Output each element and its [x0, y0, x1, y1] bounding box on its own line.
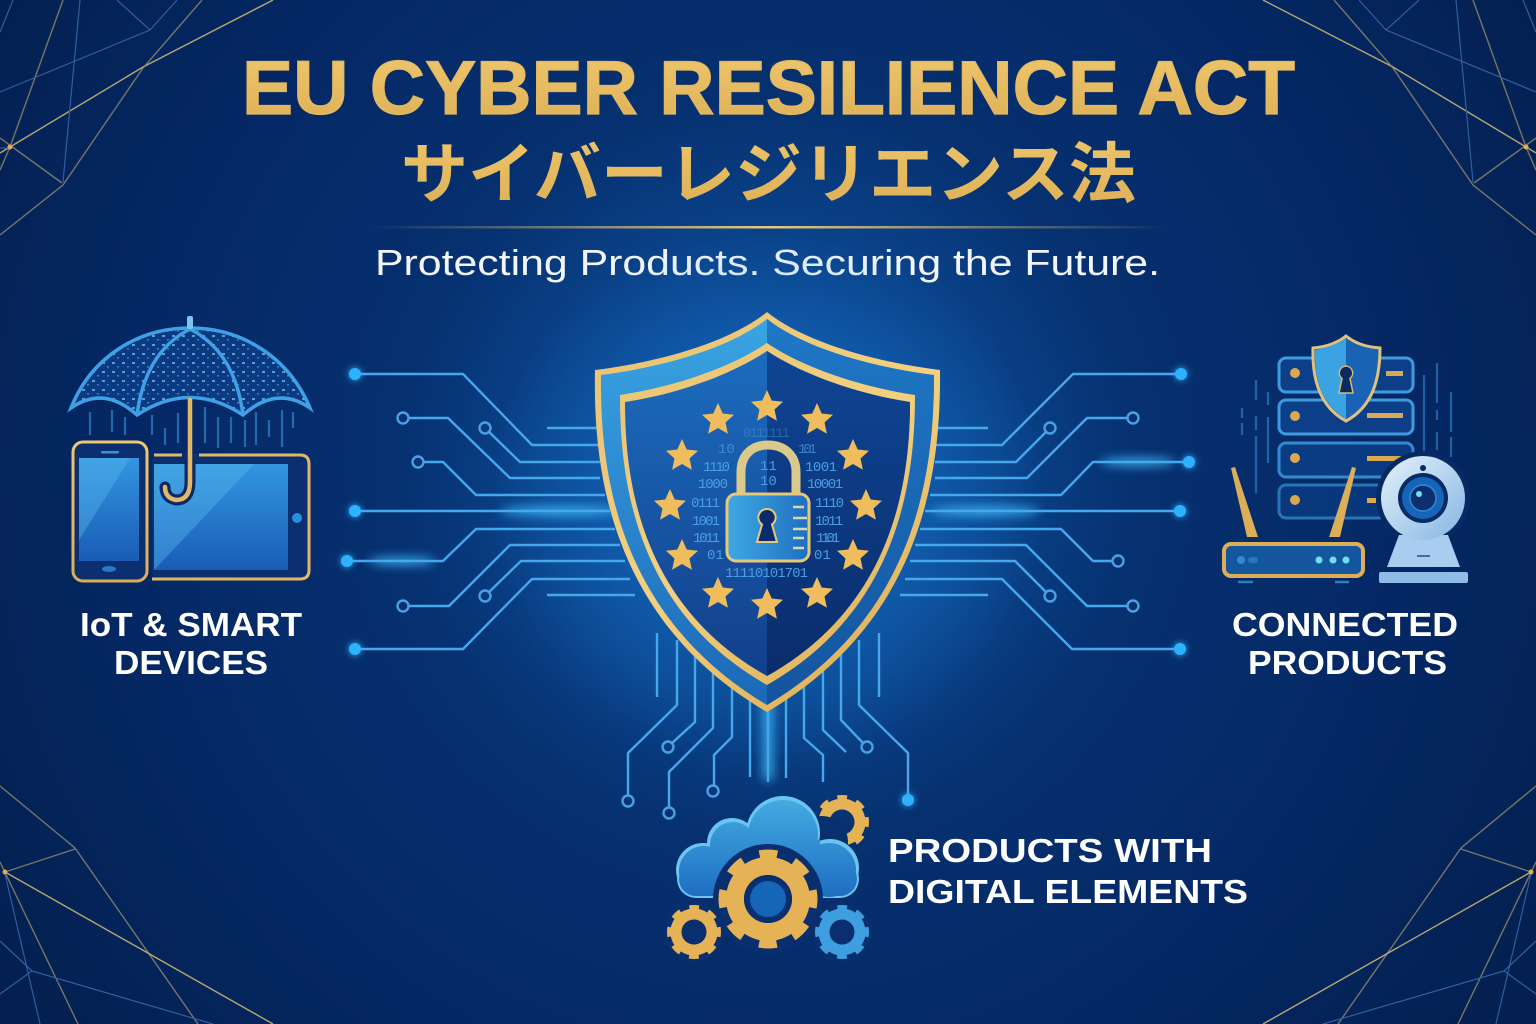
padlock — [727, 445, 809, 561]
subtitle: Protecting Products. Securing the Future. — [375, 242, 1160, 283]
small shield — [1313, 336, 1380, 421]
binary digits: 1011 — [693, 531, 720, 547]
label: connected products — [1232, 606, 1458, 681]
data streaks — [1242, 363, 1451, 493]
icon: server router camera — [1224, 336, 1470, 583]
binary digits: 1110 — [703, 460, 730, 476]
title: EU CYBER RESILIENCE ACT — [242, 46, 1295, 131]
label: products with digital elements — [888, 832, 1248, 910]
binary digits: 01 — [814, 548, 831, 564]
binary digits: 10001 — [807, 477, 843, 493]
camera — [1376, 451, 1470, 583]
gear halo — [664, 844, 872, 962]
shield inner field — [625, 351, 910, 676]
EU stars — [654, 390, 882, 619]
phone — [73, 442, 147, 581]
binary digits: 1000 — [698, 477, 728, 493]
circuit traces left — [341, 368, 635, 655]
shield outer frame — [595, 312, 940, 712]
rain — [90, 407, 293, 448]
umbrella handle — [165, 400, 190, 500]
binary digits: 01 — [707, 548, 724, 564]
padlock keyhole — [757, 509, 777, 542]
shield rim — [601, 319, 934, 705]
padlock dial — [793, 507, 807, 548]
binary digits: 1110 — [815, 496, 844, 512]
label: iot and smart devices — [80, 606, 302, 681]
padlock shackle — [741, 445, 796, 495]
binary digits: 0111111 — [743, 426, 790, 442]
divider — [370, 226, 1170, 228]
corner lines top left — [0, 0, 273, 235]
icon: umbrella over devices — [70, 316, 312, 581]
padlock body — [727, 494, 809, 561]
binary digits: 101 — [798, 442, 817, 458]
central shield — [595, 312, 940, 712]
umbrella canopy — [70, 316, 312, 417]
corner lines bottom left — [0, 786, 273, 1024]
right gear — [814, 904, 870, 960]
glow behind shield — [487, 230, 1047, 770]
corner lines bottom right — [1263, 786, 1536, 1024]
label: connected products: PRODUCTS — [1248, 644, 1447, 681]
circuit traces right — [900, 368, 1195, 655]
binary digits — [691, 426, 844, 582]
binary digits: 11 — [760, 459, 777, 475]
japanese title: サイバーレジリエンス法 — [401, 121, 1136, 217]
binary digits: 0111 — [691, 496, 720, 512]
binary digits: 1001 — [805, 460, 837, 476]
label: products with digital elements: PRODUCTS WITH — [888, 832, 1212, 869]
router — [1224, 467, 1363, 582]
main gear — [716, 847, 820, 951]
binary digits: 1011 — [815, 514, 843, 530]
binary digits: 11110101701 — [725, 566, 808, 582]
circuit traces bottom — [622, 633, 914, 818]
gear top right — [814, 794, 870, 850]
icon: cloud and gears — [664, 794, 872, 962]
shield inner gold line — [620, 343, 915, 685]
binary digits: 1101 — [816, 531, 840, 547]
label: connected products: CONNECTED — [1232, 606, 1458, 643]
binary digits: 10 — [760, 474, 777, 490]
tablet — [152, 454, 309, 580]
binary digits: 1001 — [692, 514, 720, 530]
server rack — [1279, 358, 1413, 518]
label: products with digital elements: DIGITAL ELEMENTS — [888, 873, 1248, 910]
label: iot and smart devices: DEVICES — [114, 644, 268, 681]
gear cutout — [796, 816, 848, 868]
cloud — [676, 796, 859, 898]
binary digits: 10 — [718, 442, 735, 458]
label: iot and smart devices: IoT & SMART — [80, 606, 302, 643]
left gear — [666, 904, 722, 960]
corner lines top right — [1263, 0, 1536, 235]
